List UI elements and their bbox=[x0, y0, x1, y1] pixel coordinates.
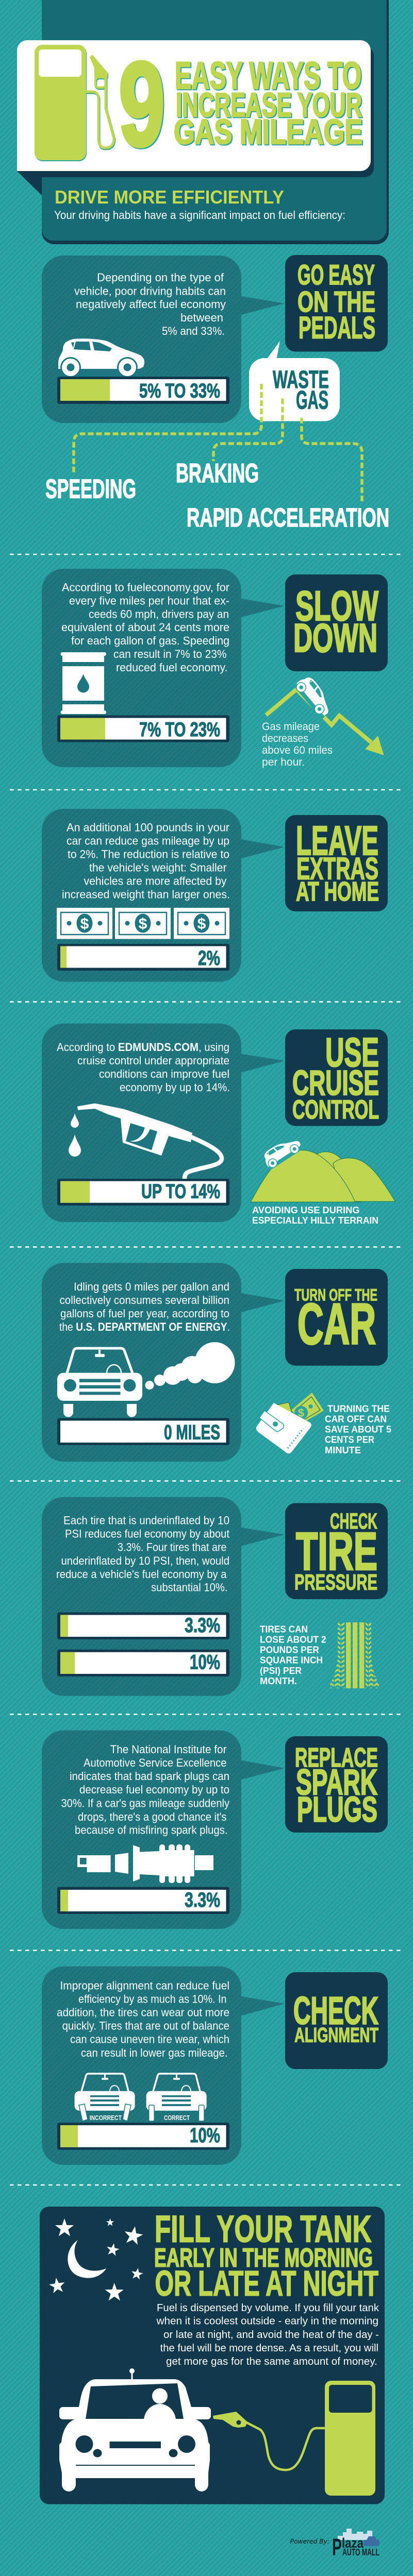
panel: driving habits bbox=[42, 256, 285, 423]
callout: waste gas bbox=[249, 341, 340, 421]
panel: fill your tank bbox=[40, 2207, 385, 2504]
panel: wheel alignment: addition, the tires can wear out more bbox=[57, 2006, 229, 2019]
note: turning the car off: CAR OFF CAN bbox=[325, 1414, 387, 1425]
panel: wheel alignment: Improper alignment can reduce fuel bbox=[60, 1979, 229, 1992]
progress bar: 10% bbox=[57, 2123, 229, 2150]
icon: car on slope bbox=[293, 673, 336, 720]
panel: spark plugs: decrease fuel economy by up to bbox=[79, 1783, 229, 1796]
note: tires can lose pressure: (PSI) PER bbox=[260, 1666, 302, 1676]
panel: wheel alignment bbox=[42, 1967, 285, 2165]
note: avoiding use during hilly terrain: ESPECIALLY HILLY TERRAIN bbox=[252, 1215, 378, 1226]
note: turning the car off bbox=[325, 1404, 391, 1455]
panel: idling: Idling gets 0 miles per gallon and bbox=[74, 1280, 229, 1293]
panel: tire inflation: reduce a vehicle's fuel economy by a bbox=[56, 1568, 227, 1581]
credit: powered by Plaza Auto Mall: P bbox=[332, 2534, 342, 2561]
credit: powered by Plaza Auto Mall: AUTO MALL bbox=[342, 2547, 379, 2557]
icon: car bbox=[58, 338, 146, 378]
panel: extra weight: vehicles are more affected by bbox=[84, 875, 227, 888]
panel: driving habits: vehicle, poor driving habits can bbox=[74, 285, 226, 298]
panel: spark plugs: drops, there's a good chance it's bbox=[78, 1810, 227, 1823]
note: gas mileage decreases: decreases bbox=[262, 733, 308, 744]
icon: idling car with smoke bbox=[57, 1342, 235, 1417]
icon: dollar bill bbox=[174, 908, 229, 939]
panel: spark plugs: The National Institute for bbox=[110, 1743, 227, 1756]
progress bar: 10%: 10% bbox=[190, 2124, 220, 2147]
panel: driving habits: between bbox=[180, 311, 223, 324]
panel: idling: collectively consumes several billion bbox=[60, 1294, 229, 1307]
progress bar: 10%: 10% bbox=[190, 1651, 220, 1673]
panel: wheel alignment: quickly. Tires that are out of balance bbox=[62, 2020, 229, 2032]
note: turning the car off: TURNING THE bbox=[327, 1404, 390, 1414]
text: fuel volume explanation: or late at night, and avoid the heat of the day - bbox=[163, 2329, 379, 2341]
progress bar: 7% to 23% bbox=[57, 715, 229, 742]
progress bar: 2%: 2% bbox=[198, 947, 220, 970]
progress bar: 5% to 33%: 5% TO 33% bbox=[139, 380, 220, 402]
note: avoiding use during hilly terrain: AVOIDING USE DURING bbox=[252, 1205, 360, 1215]
note: turning the car off: MINUTE bbox=[325, 1445, 361, 1455]
panel: extra weight: the vehicle's weight: Smaller bbox=[89, 861, 227, 874]
panel: speeding cost: equivalent of about 24 cents more bbox=[61, 621, 229, 634]
text: fuel volume explanation bbox=[156, 2302, 379, 2367]
section 7: replace spark plugs bbox=[42, 1731, 388, 1929]
title text: 9 bbox=[119, 38, 165, 171]
text: fuel volume explanation: get more gas for the same amount of money. bbox=[166, 2356, 377, 2367]
credit: powered by Plaza Auto Mall bbox=[290, 2529, 379, 2561]
heading: drive more efficiently: DRIVE MORE EFFICIENTLY bbox=[55, 187, 284, 208]
panel: idling: the U.S. DEPARTMENT OF ENERGY. bbox=[59, 1320, 230, 1333]
note: tires can lose pressure: SQUARE INCH bbox=[260, 1655, 323, 1666]
headline box: check tire pressure: CHECK bbox=[330, 1509, 377, 1534]
dashed connectors bbox=[74, 384, 362, 502]
note: turning the car off: CENTS PER bbox=[325, 1435, 374, 1445]
panel: speeding cost: ceeds 60 mph, drivers pay an bbox=[89, 607, 229, 620]
headline box: use cruise control: USE bbox=[325, 1029, 379, 1075]
section 4: use cruise control bbox=[42, 1024, 395, 1226]
panel: tire inflation: substantial 10%. bbox=[151, 1581, 228, 1594]
icon: incorrect alignment car: INCORRECT bbox=[90, 2114, 122, 2122]
panel: spark plugs: 30%. If a car's gas mileage suddenly bbox=[61, 1797, 229, 1809]
icon: dollar bill: $ bbox=[197, 916, 206, 933]
note: tires can lose pressure bbox=[260, 1624, 326, 1686]
panel: cruise control: According to EDMUNDS.COM, using bbox=[57, 1041, 229, 1054]
panel: speeding cost: can result in 7% to 23% bbox=[113, 648, 227, 660]
icon: car front with driver bbox=[59, 2368, 211, 2492]
text: fuel volume explanation: the fuel will be more dense. As a result, you will bbox=[160, 2343, 378, 2354]
progress bar: 3.3%: 3.3% bbox=[185, 1614, 220, 1637]
headline box: go easy on the pedals bbox=[285, 255, 388, 351]
icon: tire tread bbox=[330, 1622, 379, 1688]
panel: extra weight: to 2%. The reduction is relative to bbox=[68, 848, 229, 860]
note: gas mileage decreases: per hour. bbox=[262, 756, 305, 768]
panel: wheel alignment: can cause uneven tire wear, which bbox=[70, 2033, 229, 2046]
panel: extra weight: increased weight than larger ones. bbox=[62, 888, 230, 901]
title text bbox=[119, 38, 362, 171]
note: gas mileage decreases: above 60 miles bbox=[262, 744, 333, 756]
panel: wheel alignment: can result in lower gas mileage. bbox=[81, 2046, 228, 2059]
title text: GAS MILEAGE bbox=[174, 112, 362, 151]
progress bar: 2% bbox=[57, 944, 229, 971]
progress bar: up to 14%: UP TO 14% bbox=[141, 1181, 220, 1202]
note: avoiding use during hilly terrain bbox=[252, 1205, 378, 1226]
callout: waste gas: GAS bbox=[296, 385, 328, 414]
icon: fuel nozzle bbox=[69, 1104, 222, 1179]
intro text: Your driving habits have a significant impact on fuel efficiency: bbox=[54, 209, 345, 222]
panel: speeding cost: reduced fuel economy. bbox=[116, 661, 228, 674]
note: turning the car off: SAVE ABOUT 5 bbox=[325, 1425, 391, 1435]
chart: falling mileage arrow bbox=[266, 673, 384, 755]
panel: speeding cost bbox=[42, 569, 285, 767]
panel: spark plugs bbox=[42, 1731, 285, 1929]
section 3: leave extras at home bbox=[42, 809, 388, 982]
note: tires can lose pressure: TIRES CAN bbox=[260, 1624, 308, 1635]
panel: cruise control: cruise control under appropriate bbox=[77, 1054, 229, 1067]
progress bar: 3.3%: 3.3% bbox=[185, 1889, 220, 1911]
header panel bbox=[17, 0, 389, 244]
panel: idling bbox=[42, 1263, 285, 1462]
note: tires can lose pressure: LOSE ABOUT 2 bbox=[260, 1635, 326, 1645]
icon: hills with car bbox=[251, 1133, 395, 1202]
headline box: turn off the car bbox=[285, 1269, 388, 1366]
progress bar: 7% to 23%: 7% TO 23% bbox=[139, 719, 220, 741]
panel: cruise control: conditions can improve fuel bbox=[99, 1067, 229, 1080]
icon: oil barrel bbox=[61, 652, 106, 714]
panel: tire inflation: 3.3%. Four tires that are bbox=[118, 1541, 227, 1554]
panel: cruise control: economy by up to 14%. bbox=[120, 1081, 230, 1094]
icon: dollar bill: $ bbox=[80, 916, 89, 933]
panel: driving habits: 5% and 33%. bbox=[162, 325, 225, 337]
icon: correct alignment car: CORRECT bbox=[164, 2114, 190, 2122]
panel: tire inflation bbox=[42, 1497, 285, 1696]
headline box: slow down bbox=[285, 574, 388, 671]
panel: idling: gallons of fuel per year, according to bbox=[60, 1307, 229, 1320]
note: tires can lose pressure: POUNDS PER bbox=[260, 1645, 319, 1655]
panel: extra weight: An additional 100 pounds in your bbox=[67, 821, 229, 834]
credit: powered by Plaza Auto Mall: laza bbox=[342, 2535, 364, 2551]
panel: speeding cost: According to fueleconomy.gov, for bbox=[62, 581, 229, 594]
text: fuel volume explanation: when it is coolest outside - early in the morning bbox=[156, 2316, 378, 2327]
panel: tire inflation: underinflated by 10 PSI, then, would bbox=[61, 1554, 229, 1567]
section 2: slow down bbox=[42, 569, 388, 768]
icon: dollar bill: $ bbox=[139, 916, 147, 933]
panel: extra weight bbox=[42, 809, 285, 982]
icon: spark plug bbox=[77, 1844, 213, 1883]
headline box: leave extras at home bbox=[285, 815, 388, 911]
label: speeding: SPEEDING bbox=[45, 474, 136, 504]
heading: fill your tank bbox=[154, 2208, 378, 2303]
panel: spark plugs: indicates that bad spark plugs can bbox=[70, 1770, 229, 1783]
panel: cruise control bbox=[42, 1024, 285, 1222]
section 1: go easy on the pedals bbox=[42, 255, 389, 532]
progress bar: 5% to 33% bbox=[57, 377, 229, 404]
icon: gas pump with hose bbox=[213, 2381, 375, 2496]
callout: waste gas: WASTE bbox=[273, 366, 329, 394]
credit: powered by Plaza Auto Mall: Powered By: bbox=[290, 2537, 329, 2545]
banner fold bbox=[17, 171, 42, 195]
icon: dollar bill bbox=[57, 908, 112, 939]
progress bar: 3.3% bbox=[57, 1887, 229, 1914]
headline box: check tire pressure bbox=[285, 1503, 388, 1599]
headline box: use cruise control bbox=[285, 1029, 388, 1126]
label: braking: BRAKING bbox=[176, 459, 259, 488]
headline box: check tire pressure: PRESSURE bbox=[294, 1570, 377, 1595]
icon: wallet with cash: $ bbox=[298, 1406, 304, 1419]
progress bar: 0 miles bbox=[57, 1418, 229, 1445]
icon: correct alignment car bbox=[146, 2074, 207, 2122]
panel: tire inflation: PSI reduces fuel economy by about bbox=[65, 1528, 229, 1540]
note: gas mileage decreases bbox=[262, 721, 333, 768]
progress bar: 0 miles: 0 MILES bbox=[164, 1421, 220, 1444]
panel: spark plugs: because of misfiring spark plugs. bbox=[75, 1824, 228, 1837]
panel: driving habits: negatively affect fuel economy bbox=[76, 298, 226, 311]
note: gas mileage decreases: Gas mileage bbox=[262, 721, 320, 733]
icon: gas pump bbox=[35, 45, 114, 160]
title banner bbox=[17, 38, 374, 177]
progress bar: 3.3% bbox=[57, 1613, 229, 1639]
panel: speeding cost: every five miles per hour that ex- bbox=[69, 594, 229, 607]
section 6: check tire pressure bbox=[42, 1497, 388, 1696]
progress bar: up to 14% bbox=[57, 1179, 229, 1206]
headline box: replace spark plugs bbox=[285, 1736, 388, 1833]
section 8: check alignment bbox=[42, 1967, 388, 2165]
icon: dollar bill bbox=[115, 908, 171, 939]
headline box: go easy on the pedals: ON THE bbox=[298, 285, 375, 318]
section 5: turn off the car bbox=[42, 1263, 391, 1462]
panel: tire inflation: Each tire that is underinflated by 10 bbox=[63, 1514, 229, 1527]
icon: moon and stars bbox=[48, 2218, 144, 2300]
text: fuel volume explanation: Fuel is dispensed by volume. If you fill your tank bbox=[157, 2302, 379, 2314]
icon: small car bbox=[261, 1133, 304, 1170]
panel: speeding cost: for each gallon of gas. Speeding bbox=[71, 634, 229, 647]
panel: driving habits: Depending on the type of bbox=[97, 271, 224, 284]
panel: spark plugs: Automotive Service Excellence bbox=[84, 1756, 227, 1769]
note: tires can lose pressure: MONTH. bbox=[260, 1676, 297, 1686]
headline box: turn off the car: TURN OFF THE bbox=[294, 1286, 377, 1304]
panel: wheel alignment: efficiency by as much as 10%. In bbox=[78, 1993, 227, 2005]
icon: wallet with cash bbox=[256, 1393, 324, 1453]
icon: incorrect alignment car bbox=[75, 2074, 135, 2122]
headline box: check alignment bbox=[285, 1972, 388, 2069]
panel: extra weight: car can reduce gas mileage by up bbox=[67, 835, 229, 847]
progress bar: 10% bbox=[57, 1650, 229, 1676]
